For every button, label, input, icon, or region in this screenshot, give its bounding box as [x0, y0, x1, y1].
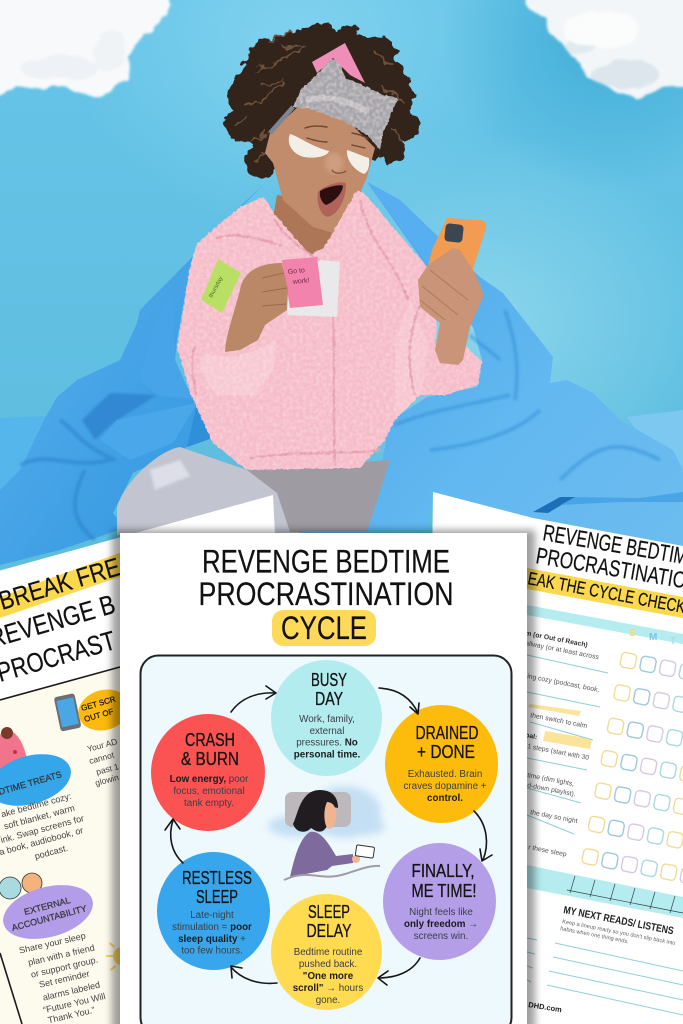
sheet: Break the Cycle checklist (right): [426, 492, 683, 1024]
tip text: external accountability: or support group.: [30, 954, 99, 980]
checklist text: m (or Out of Reach): [525, 630, 588, 649]
tip blob: get screens out of room: OUT OF: [83, 707, 115, 724]
checklist text: oal:: [525, 732, 538, 741]
step: busy day: BUSY: [311, 670, 347, 690]
tip text: screens: Your AD: [86, 736, 118, 754]
title: PROCRASTINATION: [198, 576, 454, 612]
website footer: DHD.com: [528, 1000, 563, 1014]
step: drained and done: + DONE: [417, 742, 475, 762]
step: restless sleep: RESTLESS: [182, 868, 252, 888]
step: crash and burn: CRASH: [185, 730, 235, 750]
checklist text: ing cozy (podcast, book,: [527, 673, 600, 694]
cloud: [268, 786, 385, 838]
tip text: bedtime treats: soft blanket, warm: [3, 803, 76, 831]
tip text: bedtime treats: ink. Swap screens for: [0, 813, 85, 845]
blanket: left side: [0, 185, 263, 565]
sticky note: green on robe: [201, 259, 241, 313]
photo: woman yawning wrapped in a blanket: [0, 23, 683, 565]
face: [324, 802, 337, 829]
step: finally me time: FINALLY,: [412, 861, 474, 881]
step: drained and done: craves dopamine +: [403, 781, 487, 792]
weekday letters: [629, 628, 676, 647]
tip text: external accountability: [18, 931, 106, 1024]
step: finally me time: only freedom →: [404, 919, 478, 930]
sleep mask: [270, 58, 398, 150]
blanket line: [284, 866, 380, 880]
tip text: external accountability: alarms labeled: [42, 980, 101, 1003]
step: sleep delay: Bedtime routine: [294, 947, 363, 958]
tip blob: get screens out of room: GET SCR: [80, 694, 117, 713]
card shadow: [112, 530, 535, 1024]
smartphone: [423, 218, 486, 292]
write-in lines: [527, 655, 608, 834]
reads note: habits when one thing ends.: [560, 926, 630, 945]
step: sleep delay: DELAY: [306, 921, 352, 941]
icon: smiley friends: [0, 873, 42, 899]
arrow: restless to crash: [165, 819, 183, 863]
pink fleece robe: [177, 190, 482, 470]
weekday letters: S: [629, 628, 636, 639]
step: sleep delay: SLEEP: [308, 902, 350, 922]
tip text: bedtime treats: podcast.: [33, 843, 69, 861]
tip blob: bedtime treats: [0, 745, 77, 815]
step: sleep delay: "One more: [303, 971, 354, 982]
tip text: bedtime treats: a book, audiobook, or: [0, 825, 84, 857]
yellow write-in highlights: [528, 704, 592, 749]
step: busy day: DAY: [315, 689, 343, 709]
step: sleep delay: gone.: [316, 995, 340, 1006]
step: drained and done: DRAINED: [416, 723, 478, 743]
step: restless sleep: Late-night: [190, 910, 234, 921]
arrow: sleep delay to restless: [231, 966, 277, 983]
reads write-in lines: [527, 938, 683, 1015]
step: finally me time: [383, 843, 496, 960]
checklist text: the day so night: [530, 809, 578, 825]
sheet: Break Free tips (left): [0, 495, 300, 1024]
step: sleep delay: pushed back.: [299, 959, 357, 970]
checklist text: [525, 630, 600, 858]
step: busy day: personal time.: [294, 750, 360, 760]
reads note: Keep a lineup ready so you don't slip back into: [562, 919, 676, 947]
arrow: busy day to drained: [379, 688, 419, 714]
grey pants: [117, 447, 390, 535]
step: crash and burn: [151, 714, 265, 831]
sticky note: mug: Go to: [287, 267, 305, 276]
teal tracker table: [527, 865, 683, 918]
eye patches: [289, 134, 369, 174]
sticky note: mug: work!: [291, 277, 310, 286]
teal header band: [527, 605, 683, 644]
weekday letters: M: [649, 632, 657, 643]
blanket: right side: [367, 182, 683, 550]
tip text: external accountability: “Future You Will: [42, 991, 106, 1015]
step: restless sleep: SLEEP: [196, 887, 238, 907]
step: finally me time: ME TIME!: [412, 881, 476, 901]
cloud: top right: [522, 0, 683, 98]
finger lines: [262, 273, 287, 306]
nose highlight: [325, 153, 343, 173]
cycle panel: [140, 656, 512, 1024]
hair: [293, 790, 338, 832]
sheet heading: [0, 589, 119, 688]
step: crash and burn: tank empty.: [184, 798, 234, 809]
face: [265, 105, 375, 233]
step: sleep delay: scroll" → hours: [293, 983, 363, 994]
icon: sun: [106, 942, 131, 971]
yawning mouth: [317, 182, 346, 217]
step: restless sleep: too few hours.: [181, 946, 243, 956]
tip text: external accountability: Share your sleep: [18, 931, 87, 956]
step: restless sleep: [157, 852, 270, 970]
sticky note: mug: [282, 257, 323, 308]
title: [198, 544, 454, 612]
icon: phone: [54, 693, 82, 732]
step: drained and done: [385, 705, 498, 823]
weekday letters: T: [670, 636, 676, 647]
step: busy day: external: [310, 726, 344, 737]
tip text: external accountability: plan with a friend: [27, 943, 96, 968]
title highlight: cycle: CYCLE: [281, 610, 367, 646]
arrow: finally to sleep delay: [378, 958, 420, 985]
checklist text: time (dim lights,: [527, 772, 575, 788]
neck: [273, 195, 352, 255]
body: [290, 832, 353, 877]
step: finally me time: screens win.: [414, 931, 468, 942]
phone in hand: [352, 845, 375, 863]
step: busy day: [271, 660, 382, 776]
tip blob: external accountability: [0, 876, 99, 948]
step: drained and done: Exhausted. Brain: [408, 769, 482, 780]
step: restless sleep: sleep quality +: [178, 934, 246, 945]
mug: [285, 260, 340, 317]
left hand holding mug: [225, 263, 288, 352]
checklist text: then switch to calm: [530, 712, 588, 730]
step: crash and burn: & BURN: [181, 749, 239, 769]
hair: [224, 23, 420, 179]
closed eyes and brows: [305, 126, 368, 173]
tip text: external accountability: Set reminder: [38, 968, 91, 990]
tip blob: external accountability: ACCOUNTABILITY: [11, 903, 88, 933]
tip blob: get screens out of room: [73, 684, 135, 736]
tip text: screens: cannot: [88, 750, 116, 766]
checklist text: allway (or at least across: [525, 640, 600, 661]
sticky note: forehead: [312, 43, 365, 83]
step: finally me time: Night feels like: [409, 907, 473, 918]
sticky note: green on robe: thursday: [208, 276, 225, 299]
cloud: top left: [0, 0, 170, 100]
tip text: screens: [86, 736, 120, 788]
step: sleep delay: [271, 894, 382, 1010]
tip text: screens: past 1: [95, 761, 120, 777]
step: restless sleep: stimulation = poor: [172, 922, 252, 933]
title: REVENGE BEDTIME: [202, 544, 450, 580]
checklist text: r these sleep: [528, 844, 567, 858]
tip text: bedtime treats: ake bedtime cozy:: [0, 791, 73, 819]
checkbox grid: [581, 652, 683, 885]
step: crash and burn: focus, emotional: [173, 786, 245, 797]
step: busy day: pressures. No: [296, 738, 358, 748]
step: drained and done: control.: [427, 793, 463, 804]
main card: [120, 533, 527, 1024]
arrow: drained to finally: [474, 811, 492, 861]
tip text: screens: glowin: [94, 772, 120, 788]
checklist text: 1 steps (start with 30: [527, 743, 590, 762]
step: busy day: Work, family,: [299, 714, 355, 725]
checklist text: d-down playlist).: [527, 782, 576, 798]
tip text: bedtime treats: [0, 791, 85, 861]
step: crash and burn: Low energy, poor: [170, 774, 249, 785]
illustration: woman in bed on phone: [268, 786, 385, 880]
pillow: [285, 792, 351, 827]
icon: pink blanket bedtime treat: [0, 727, 30, 775]
tip blob: external accountability: EXTERNAL: [23, 895, 71, 917]
right hand holding phone: [418, 248, 484, 365]
arrow: crash to busy: [231, 686, 276, 712]
